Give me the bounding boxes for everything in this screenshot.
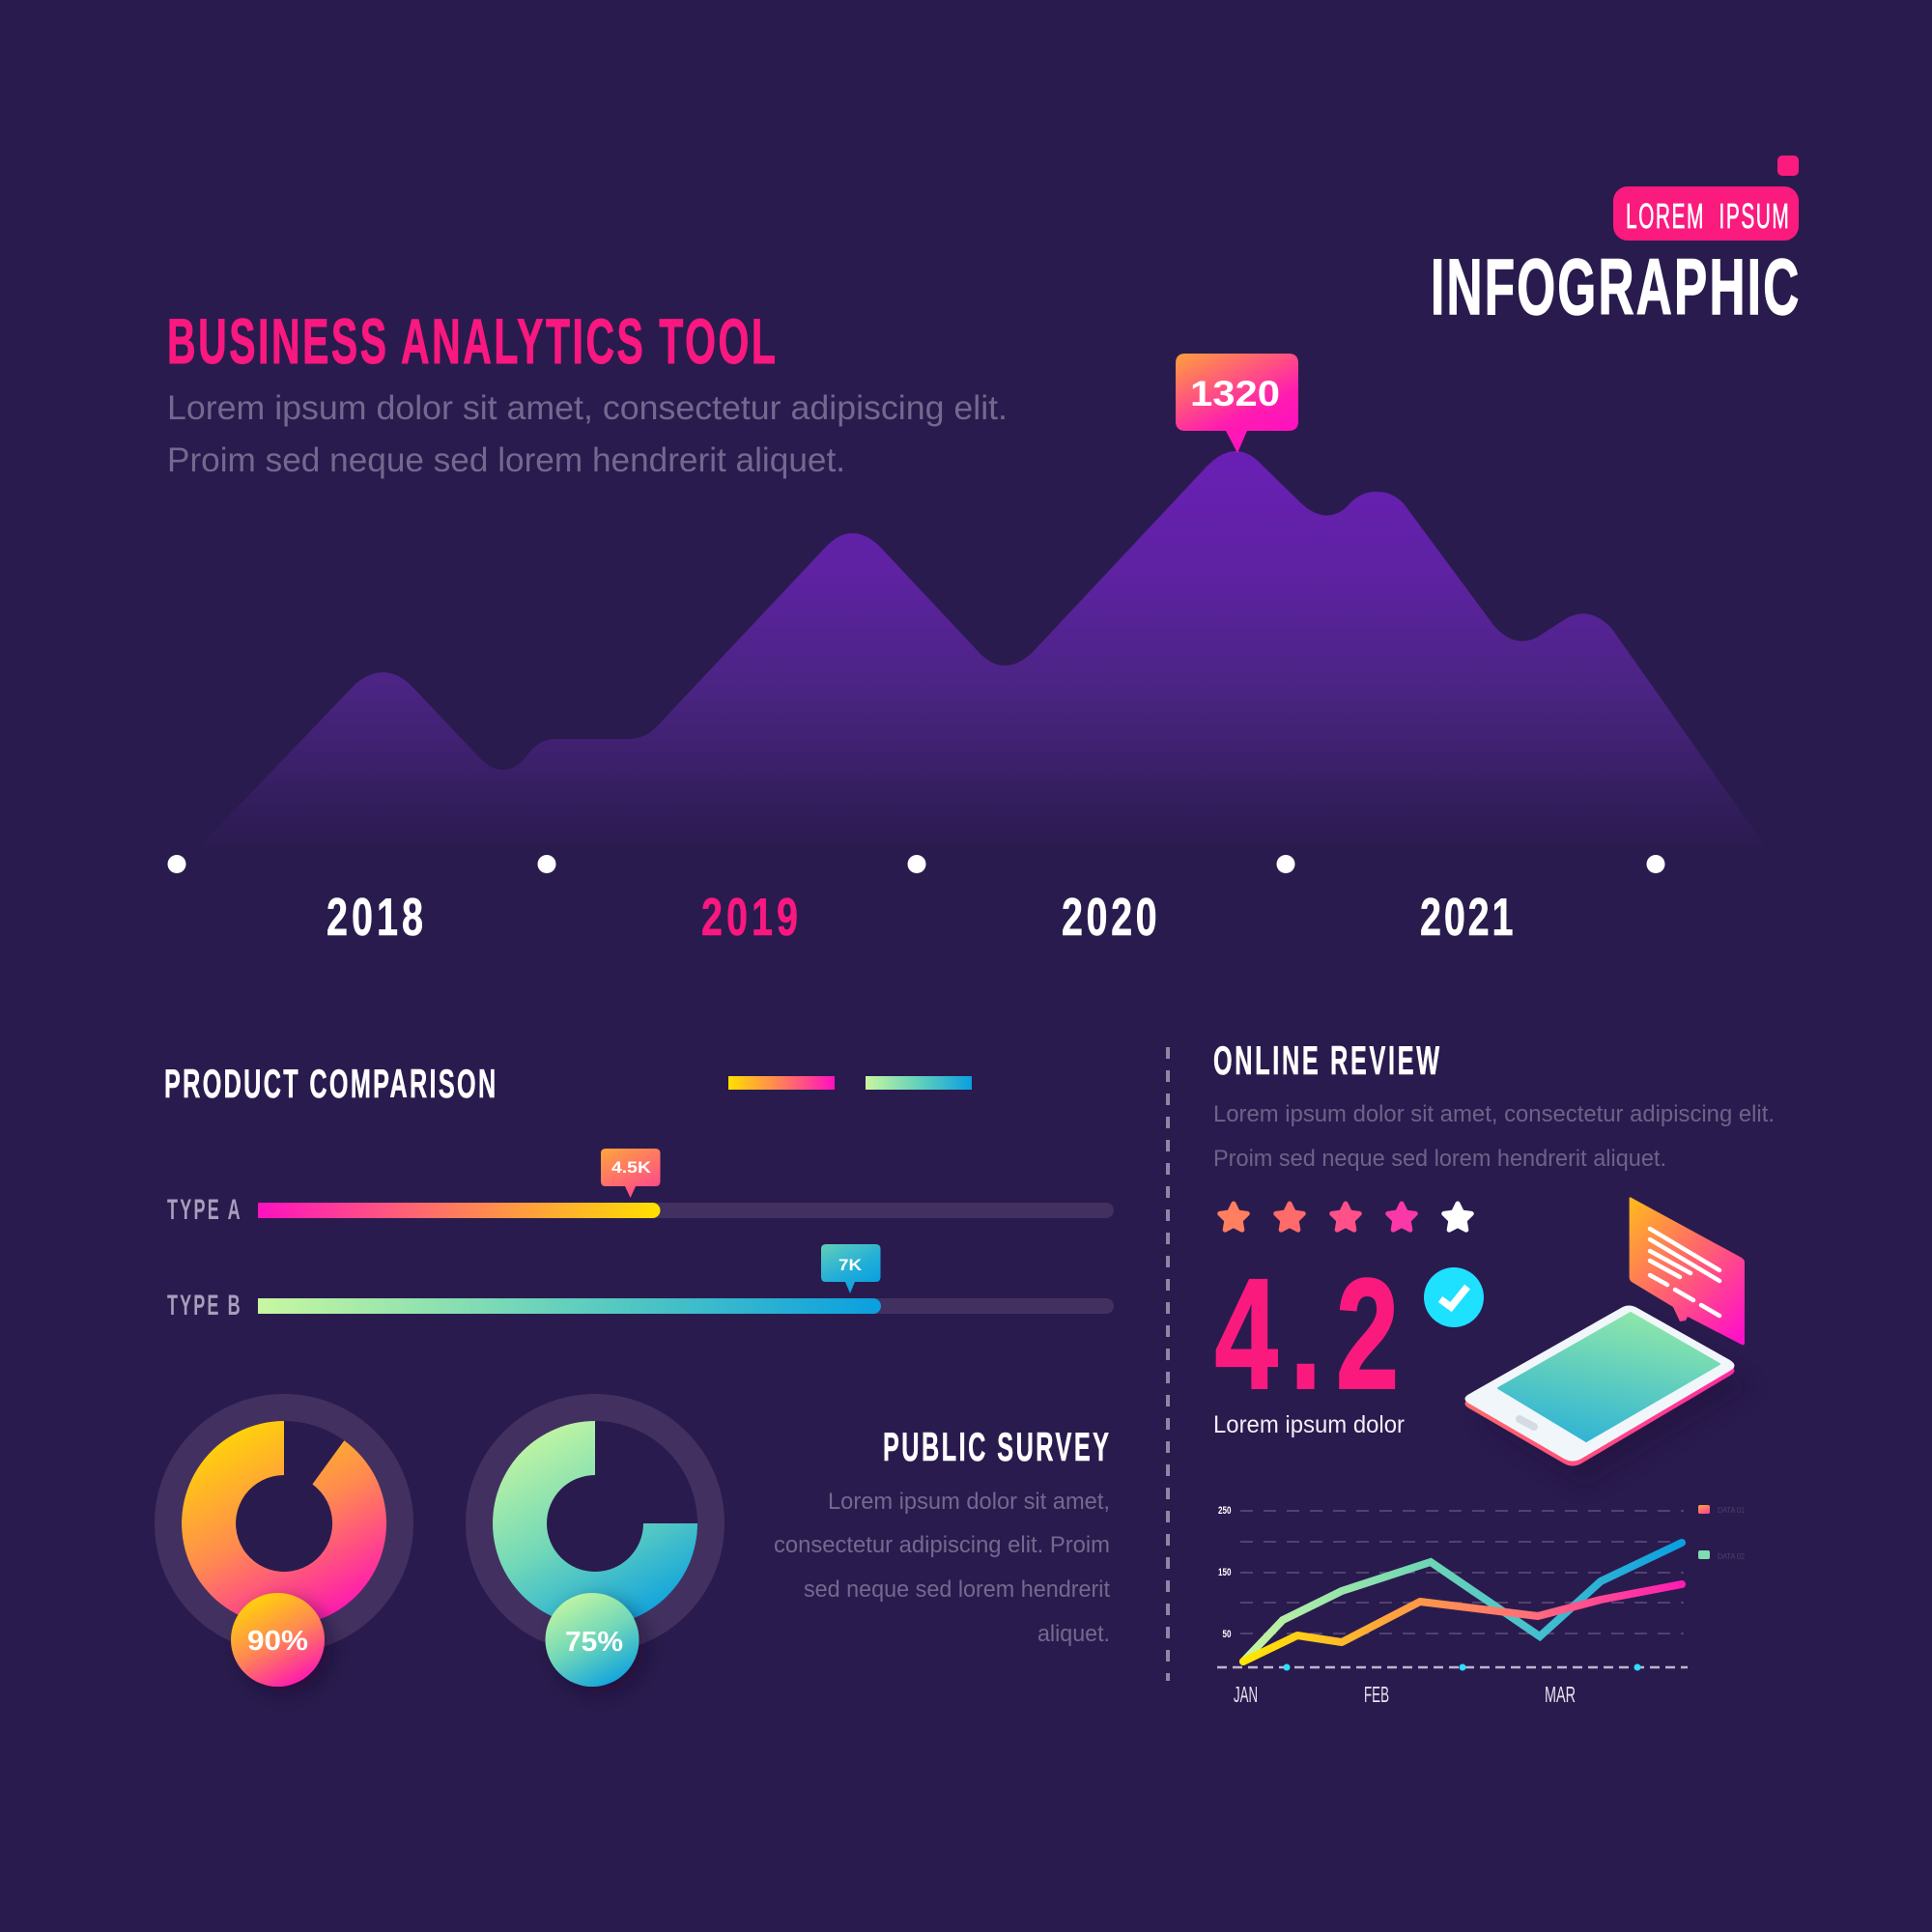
y axis labels: 150 <box>1218 1567 1231 1578</box>
donut chart 90% <box>168 1407 400 1687</box>
chart legend <box>1698 1505 1746 1561</box>
series 1 line <box>1243 1584 1682 1662</box>
star rating <box>1220 1204 1471 1230</box>
tablet edge <box>1464 1310 1735 1466</box>
timeline years: 2021 <box>1420 889 1513 948</box>
month labels: JAN <box>1234 1682 1258 1707</box>
axis markers <box>1283 1663 1640 1671</box>
badge 90%: 90% <box>247 1626 308 1657</box>
timeline years: 2019 <box>701 889 798 948</box>
tablet shadow <box>1478 1323 1753 1488</box>
callout: 1320 <box>1176 354 1298 453</box>
icon: check badge <box>1424 1267 1484 1327</box>
heading: public survey: PUBLIC SURVEY <box>883 1426 1109 1470</box>
badge 90% <box>231 1593 325 1687</box>
icon: tablet <box>1464 1306 1753 1488</box>
bubble text lines <box>1650 1229 1719 1316</box>
chart legend: DATA 02 <box>1718 1552 1746 1561</box>
public survey text: sed neque sed lorem hendrerit <box>804 1577 1110 1603</box>
chart legend: DATA 01 <box>1718 1506 1746 1515</box>
y axis labels <box>1218 1505 1231 1640</box>
tag: 4.5K: 4.5K <box>611 1158 652 1177</box>
intro text <box>167 389 1008 479</box>
public survey text: aliquet. <box>1037 1621 1110 1647</box>
tag: 4.5K <box>601 1149 661 1198</box>
public survey text: Lorem ipsum dolor sit amet, <box>828 1489 1110 1515</box>
bar: type B <box>167 1244 1114 1321</box>
timeline years <box>327 889 1513 948</box>
y axis labels: 50 <box>1223 1629 1231 1640</box>
intro text: Lorem ipsum dolor sit amet, consectetur adipiscing elit. <box>167 389 1008 427</box>
heading: online review: ONLINE REVIEW <box>1213 1039 1439 1084</box>
home button <box>1520 1419 1534 1427</box>
series 2 line <box>1243 1543 1682 1662</box>
rating number: 4.2 <box>1215 1246 1399 1423</box>
online review text: Lorem ipsum dolor sit amet, consectetur adipiscing elit. <box>1213 1101 1775 1127</box>
timeline years: 2020 <box>1062 889 1157 948</box>
lorem ipsum pill: LOREM IPSUM <box>1626 197 1789 237</box>
online review text: Proim sed neque sed lorem hendrerit aliquet. <box>1213 1146 1666 1172</box>
month labels: MAR <box>1545 1682 1576 1707</box>
bar: type A <box>167 1149 1114 1226</box>
lorem ipsum pill <box>1613 186 1799 241</box>
month labels <box>1234 1682 1576 1707</box>
heading: business analytics tool: BUSINESS ANALYTICS TOOL <box>167 305 776 377</box>
online review text <box>1213 1101 1775 1172</box>
month labels: FEB <box>1364 1682 1389 1707</box>
timeline dots <box>168 855 1665 873</box>
icon: chat bubble <box>1630 1197 1745 1345</box>
legend bars <box>728 1076 972 1090</box>
tablet screen <box>1498 1313 1719 1441</box>
x axis <box>1217 1666 1688 1668</box>
bar: type A: TYPE A <box>167 1195 241 1226</box>
grid lines <box>1240 1511 1684 1634</box>
badge 75%: 75% <box>565 1627 623 1658</box>
intro text: Proim sed neque sed lorem hendrerit aliquet. <box>167 441 845 479</box>
donut chart 75% <box>479 1407 711 1687</box>
callout: 1320: 1320 <box>1190 374 1280 413</box>
tablet body <box>1464 1306 1735 1461</box>
line chart <box>1217 1505 1746 1707</box>
heading: product comparison: PRODUCT COMPARISON <box>164 1063 496 1107</box>
y axis labels: 250 <box>1218 1505 1231 1517</box>
infographic title: INFOGRAPHIC <box>1431 243 1799 331</box>
badge 75% <box>545 1593 639 1687</box>
timeline years: 2018 <box>327 889 423 948</box>
tag: 7K: 7K <box>838 1256 863 1274</box>
bar: type B: TYPE B <box>167 1291 241 1321</box>
decorative pink square <box>1777 156 1799 176</box>
public survey text: consectetur adipiscing elit. Proim <box>774 1532 1110 1558</box>
public survey text <box>774 1489 1110 1647</box>
title block <box>1431 156 1799 331</box>
mountain area chart <box>196 451 1768 850</box>
tag: 7K <box>821 1244 881 1293</box>
rating caption: Lorem ipsum dolor <box>1213 1411 1405 1438</box>
